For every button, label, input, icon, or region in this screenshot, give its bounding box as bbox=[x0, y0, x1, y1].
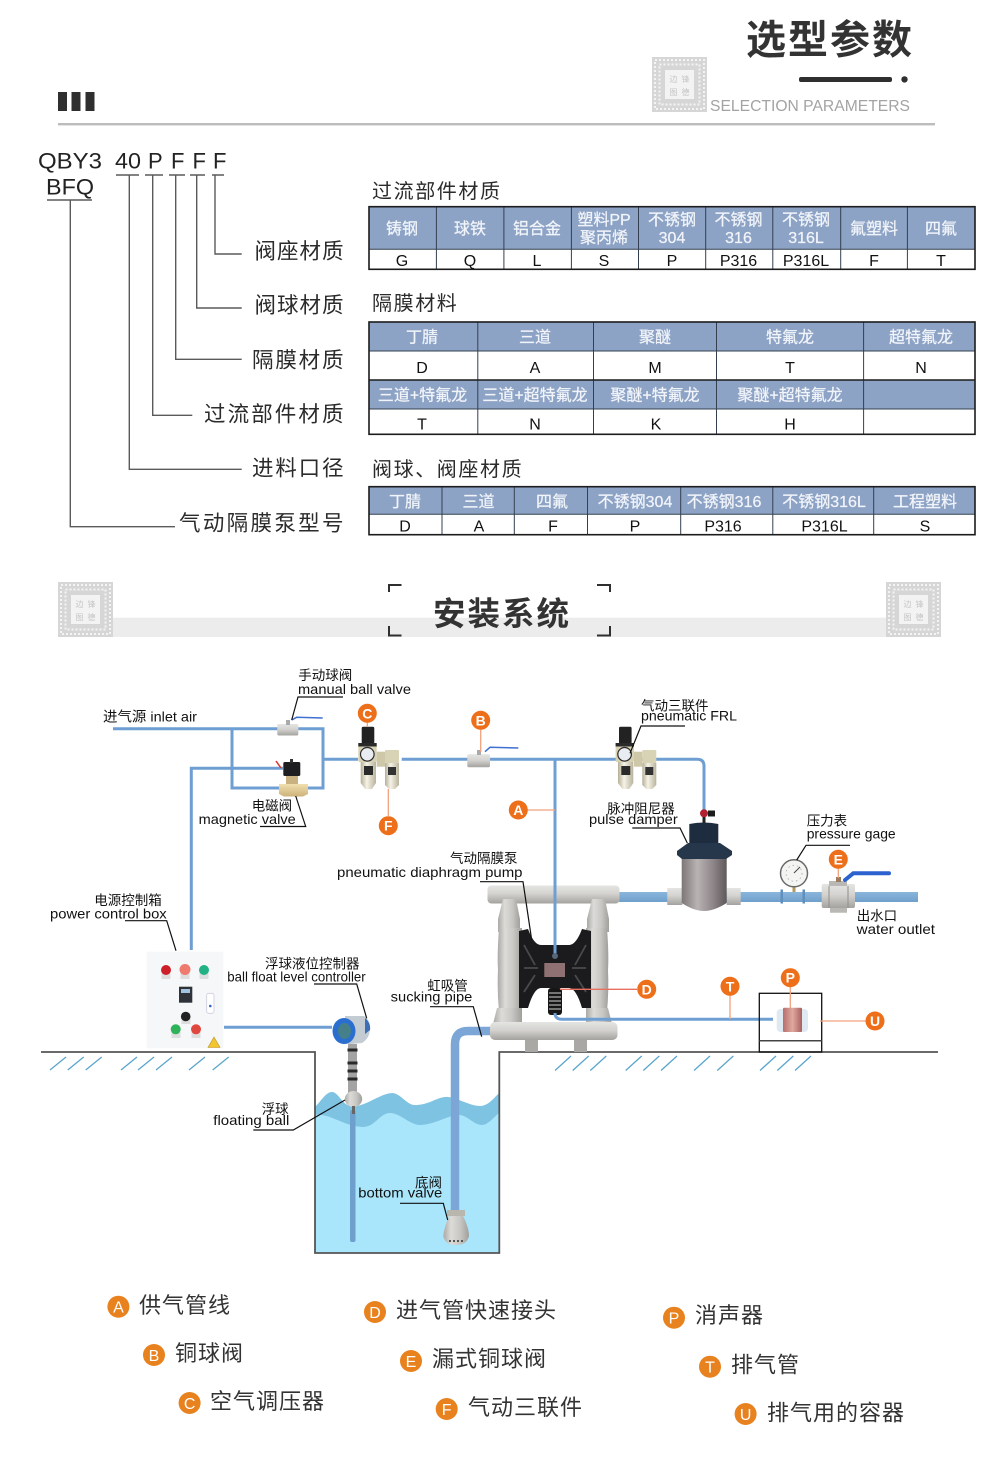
label: water outlet: water outlet bbox=[856, 921, 935, 937]
header row 2 bbox=[378, 386, 843, 404]
label: pressure gage: pressure gage bbox=[807, 825, 896, 841]
code row: A bbox=[474, 518, 485, 536]
code row: P bbox=[630, 518, 640, 536]
header row: 工程塑料 bbox=[893, 493, 957, 511]
header row: 不锈钢 bbox=[648, 211, 696, 229]
label: ball float level controller bbox=[227, 956, 367, 1018]
three bars icon bbox=[58, 92, 94, 111]
label: pulse damper bbox=[589, 801, 687, 843]
upper manifold bbox=[488, 886, 620, 904]
table 3 bbox=[369, 487, 975, 536]
right stamp: 边 bbox=[904, 599, 912, 609]
label: sucking pipe: sucking pipe bbox=[391, 989, 473, 1005]
model code characters: F bbox=[192, 148, 206, 174]
section title: 安装系统 bbox=[433, 596, 571, 632]
code meaning labels: 隔膜材质 bbox=[252, 348, 344, 372]
code row: G bbox=[396, 253, 408, 270]
water tank bbox=[315, 1092, 499, 1253]
code meaning labels: 阀球材质 bbox=[254, 294, 344, 318]
legend item T bbox=[699, 1352, 800, 1378]
header row: 塑料PP bbox=[577, 211, 631, 229]
label: bottom valve bbox=[358, 1175, 448, 1220]
air pipes upper network bbox=[113, 729, 704, 1027]
float stem pipe bbox=[350, 1110, 356, 1242]
callout leaders bbox=[367, 722, 866, 1021]
code row bbox=[399, 518, 930, 536]
icon: FRL unit C bbox=[358, 727, 399, 789]
header row 2: 三道+特氟龙 bbox=[378, 386, 467, 404]
right stamp: 图 bbox=[904, 613, 912, 622]
legend item U: 排气用的容器 bbox=[767, 1400, 905, 1426]
badge D: D bbox=[642, 981, 652, 997]
label: manual ball valve bbox=[292, 668, 411, 720]
stamp emblem: 德 bbox=[682, 87, 690, 97]
header row: 316L bbox=[788, 230, 824, 247]
heading: selection parameters bbox=[58, 18, 935, 125]
code row 1 bbox=[416, 360, 927, 377]
icon: float level controller bbox=[332, 1016, 370, 1114]
legend item F: F bbox=[442, 1402, 452, 1419]
label: water outlet bbox=[856, 909, 935, 937]
legend item D: D bbox=[369, 1305, 381, 1322]
label: water outlet: 出水口 bbox=[857, 909, 897, 924]
legend item E: E bbox=[406, 1354, 416, 1371]
header row 2: 聚醚+特氟龙 bbox=[610, 386, 700, 404]
badge P bbox=[781, 968, 800, 987]
installation diagram bbox=[41, 668, 938, 1253]
model code characters: QBY3 bbox=[38, 148, 102, 174]
pump air inlet port bbox=[552, 953, 558, 959]
label: pneumatic FRL: pneumatic FRL bbox=[641, 708, 737, 724]
icon: pressure gauge bbox=[780, 860, 808, 892]
table 2 bbox=[369, 322, 975, 434]
stamp emblem: 图 bbox=[670, 88, 678, 97]
heading rule bbox=[58, 123, 935, 125]
label: floating ball bbox=[213, 1100, 345, 1130]
header row: 四氟 bbox=[536, 493, 568, 511]
header row: 球铁 bbox=[454, 220, 486, 238]
header row 1: 超特氟龙 bbox=[889, 328, 953, 346]
code row 1: A bbox=[530, 360, 541, 377]
model code characters: P bbox=[148, 148, 163, 174]
ground hatching bbox=[50, 1056, 811, 1070]
badge E bbox=[829, 850, 848, 869]
badge C: C bbox=[362, 705, 372, 721]
water outlet pipe bbox=[619, 890, 918, 904]
header row 2: 聚醚+超特氟龙 bbox=[737, 386, 843, 404]
label: power control box: 电源控制箱 bbox=[94, 893, 162, 908]
legend item T: 排气管 bbox=[731, 1352, 800, 1378]
subheading: 隔膜材料 bbox=[372, 292, 458, 315]
label: pneumatic FRL bbox=[630, 699, 737, 753]
code row: P316 bbox=[704, 518, 742, 536]
code row: F bbox=[548, 518, 558, 536]
model code characters bbox=[38, 148, 226, 200]
header row: 不锈钢 bbox=[714, 211, 763, 229]
subheading: 过流部件材质 bbox=[372, 180, 502, 203]
label: power control box: power control box bbox=[50, 905, 167, 921]
code meaning labels: 阀座材质 bbox=[254, 240, 344, 264]
left stamp: 锋 bbox=[88, 599, 96, 609]
label: inlet air: 进气源 inlet air bbox=[103, 709, 197, 725]
badge B bbox=[471, 711, 490, 730]
code meaning labels: 气动隔膜泵型号 bbox=[179, 512, 344, 536]
badge F bbox=[379, 816, 398, 835]
title: 选型参数 bbox=[746, 18, 914, 62]
label: magnetic valve: magnetic valve bbox=[199, 811, 296, 827]
code meaning labels: 过流部件材质 bbox=[204, 402, 344, 426]
code row: P316 bbox=[720, 253, 757, 270]
badge C bbox=[358, 704, 377, 723]
legend item A: 供气管线 bbox=[139, 1293, 231, 1318]
legend item E: 漏式铜球阀 bbox=[432, 1346, 547, 1372]
model code characters: F bbox=[171, 148, 184, 174]
right stamp: 德 bbox=[916, 612, 924, 622]
label: manual ball valve: 手动球阀 bbox=[298, 668, 352, 683]
code row: P316L bbox=[783, 253, 829, 270]
stamp emblem: 边 bbox=[670, 74, 678, 84]
header row 1: 三道 bbox=[519, 328, 551, 346]
icon: manual ball valve bbox=[277, 717, 323, 736]
header row 1: 丁腈 bbox=[406, 328, 438, 346]
legend item A: A bbox=[113, 1300, 124, 1316]
label: floating ball: floating ball bbox=[213, 1112, 289, 1128]
panel: diaphragm material bbox=[369, 292, 975, 434]
header row: 四氟 bbox=[925, 220, 957, 238]
header row: 三道 bbox=[462, 493, 495, 511]
code row: F bbox=[869, 253, 879, 270]
legend item C: 空气调压器 bbox=[210, 1389, 325, 1414]
code row bbox=[396, 253, 946, 270]
left stamp: 图 bbox=[76, 613, 84, 622]
label: floating ball: 浮球 bbox=[262, 1102, 289, 1117]
stamp emblem: 锋 bbox=[682, 74, 690, 84]
header row: 不锈钢304 bbox=[598, 493, 672, 511]
header row 1 bbox=[406, 328, 953, 346]
badge F: F bbox=[384, 818, 393, 834]
icon: ball valve E bbox=[822, 873, 889, 913]
suction pipe bbox=[455, 1031, 492, 1213]
right stamp: 锋 bbox=[916, 599, 924, 609]
label: pneumatic diaphragm pump bbox=[337, 851, 532, 940]
label: pulse damper: pulse damper bbox=[589, 811, 678, 827]
label: pressure gage: 压力表 bbox=[807, 813, 848, 828]
label: bottom valve: 底阀 bbox=[415, 1175, 442, 1190]
label: ball float level controller: ball float level controller bbox=[227, 969, 366, 985]
legend item F: 气动三联件 bbox=[468, 1395, 583, 1420]
icon: magnetic valve bbox=[276, 759, 308, 796]
badge B: B bbox=[476, 712, 486, 728]
panel: ball and seat material bbox=[369, 458, 975, 536]
header row: 丁腈 bbox=[389, 493, 421, 511]
label: magnetic valve: 电磁阀 bbox=[252, 799, 292, 814]
icon: FRL unit F bbox=[616, 727, 656, 789]
code row: L bbox=[533, 253, 542, 270]
label: sucking pipe: 虹吸管 bbox=[427, 979, 468, 994]
model code characters: BFQ bbox=[46, 174, 94, 200]
icon: bottom valve bbox=[443, 1210, 469, 1245]
code row 2: K bbox=[651, 416, 662, 434]
header row: 304 bbox=[659, 230, 685, 247]
heading: installation system bbox=[58, 582, 941, 637]
code row 2: H bbox=[784, 416, 796, 434]
code row: P316L bbox=[801, 518, 848, 536]
code row 2: T bbox=[417, 416, 427, 434]
legend item D: 进气管快速接头 bbox=[396, 1298, 557, 1323]
badge T bbox=[720, 977, 740, 996]
legend item P bbox=[663, 1303, 764, 1329]
header row bbox=[389, 493, 957, 511]
left stamp bbox=[58, 582, 113, 637]
name plate bbox=[544, 963, 565, 977]
ground line bbox=[41, 1052, 938, 1253]
legend item P: P bbox=[669, 1310, 679, 1328]
badge D bbox=[637, 980, 656, 999]
legend item B: 铜球阀 bbox=[175, 1341, 244, 1366]
code row: P bbox=[667, 253, 677, 270]
lower necks bbox=[493, 1008, 522, 1024]
label: pneumatic diaphragm pump: 气动隔膜泵 bbox=[450, 851, 518, 866]
code row: S bbox=[920, 518, 930, 536]
header row: 聚丙烯 bbox=[580, 229, 628, 247]
left stamp: 德 bbox=[88, 612, 96, 622]
feet bbox=[525, 1040, 587, 1052]
code row 1: T bbox=[785, 360, 795, 377]
header row: 不锈钢 bbox=[782, 211, 830, 229]
title dash and dot bbox=[799, 76, 908, 83]
stamp emblem bbox=[652, 57, 707, 112]
english subtitle: SELECTION PARAMETERS bbox=[710, 98, 910, 115]
header row 1: 特氟龙 bbox=[766, 328, 814, 346]
header row 1: 聚醚 bbox=[639, 328, 671, 346]
badge P: P bbox=[786, 970, 795, 986]
code row 1: D bbox=[416, 360, 428, 377]
label: pneumatic FRL: 气动三联件 bbox=[641, 699, 708, 714]
badge A: A bbox=[513, 802, 523, 818]
icon: muffler and exhaust box bbox=[759, 993, 822, 1052]
label: magnetic valve bbox=[199, 796, 306, 827]
header row: 铸钢 bbox=[386, 220, 418, 238]
icon: pulse damper bbox=[667, 809, 741, 911]
label: manual ball valve: manual ball valve bbox=[298, 681, 411, 697]
label: power control box bbox=[50, 893, 176, 951]
pump chambers bbox=[498, 928, 522, 1012]
code row 2 bbox=[417, 416, 796, 434]
legend item C: C bbox=[184, 1396, 195, 1413]
table 1 bbox=[369, 207, 975, 270]
label: sucking pipe bbox=[391, 979, 482, 1037]
subheading: 阀球、阀座材质 bbox=[372, 458, 523, 481]
corner brackets bbox=[389, 585, 610, 636]
label: pressure gage bbox=[797, 813, 896, 860]
badge E: E bbox=[834, 851, 843, 867]
lower manifold bbox=[490, 1022, 618, 1040]
header row: 不锈钢316 bbox=[687, 493, 761, 511]
code row: Q bbox=[464, 253, 476, 270]
badge U bbox=[866, 1012, 884, 1030]
label: pneumatic diaphragm pump: pneumatic diaphragm pump bbox=[337, 864, 523, 880]
header row 2: 三道+超特氟龙 bbox=[482, 386, 588, 404]
badge U: U bbox=[870, 1013, 880, 1029]
legend bbox=[107, 1293, 905, 1426]
legend item U: U bbox=[740, 1407, 751, 1424]
heading band bbox=[112, 618, 886, 637]
label: ball float level controller: 浮球液位控制器 bbox=[265, 956, 360, 971]
legend item B: B bbox=[149, 1348, 159, 1365]
header row: 铝合金 bbox=[513, 220, 561, 238]
code row: D bbox=[399, 518, 411, 536]
legend item B bbox=[143, 1341, 244, 1366]
code row 1: N bbox=[915, 360, 927, 377]
left stamp: 边 bbox=[76, 599, 84, 609]
model code characters: 40 bbox=[115, 148, 141, 174]
badge T: T bbox=[726, 978, 735, 994]
black centre housing bbox=[519, 929, 591, 1008]
header row bbox=[386, 211, 957, 247]
code row: S bbox=[599, 253, 609, 270]
model code breakdown bbox=[38, 148, 344, 536]
legend item T: T bbox=[705, 1360, 715, 1376]
code meaning labels: 进料口径 bbox=[252, 456, 344, 480]
model code characters: F bbox=[213, 148, 226, 174]
header row: 316 bbox=[725, 230, 752, 247]
right stamp bbox=[886, 582, 941, 637]
spring bbox=[548, 988, 562, 1015]
code row 1: M bbox=[648, 360, 662, 377]
label: pulse damper: 脉冲阻尼器 bbox=[607, 801, 675, 816]
label: bottom valve: bottom valve bbox=[358, 1185, 443, 1201]
badge A bbox=[509, 800, 528, 820]
code meaning labels bbox=[179, 240, 344, 536]
icon: ball valve B bbox=[467, 747, 518, 767]
code row: T bbox=[936, 253, 946, 270]
icon: diaphragm pump bbox=[488, 886, 620, 1052]
air pipes over pump bbox=[555, 759, 773, 1019]
panel: wetted parts material bbox=[369, 180, 975, 270]
header row: 不锈钢316L bbox=[782, 493, 866, 511]
header row: 氟塑料 bbox=[850, 220, 898, 238]
code connector lines bbox=[47, 175, 242, 527]
legend item P: 消声器 bbox=[695, 1303, 764, 1328]
code row 2: N bbox=[529, 416, 541, 434]
icon: power control box bbox=[147, 952, 223, 1048]
upper necks bbox=[498, 899, 520, 932]
